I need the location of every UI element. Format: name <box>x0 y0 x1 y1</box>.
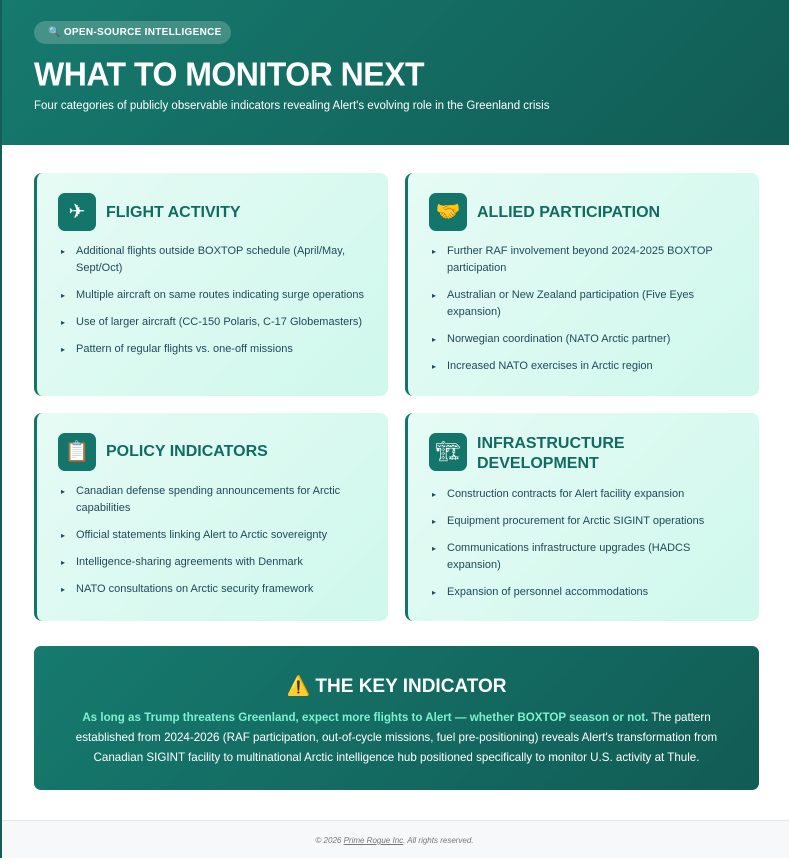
list: Further RAF involvement beyond 2024-2025 BOXTOP participation <box>447 245 713 274</box>
list <box>432 488 704 598</box>
heading: ALLIED PARTICIPATION <box>477 204 660 221</box>
heading: INFRASTRUCTURE <box>477 435 625 452</box>
text: As long as Trump threatens Greenland, expect more flights to Alert — whether BOXTOP season or not. The pattern established from 2024-2026 (RAF participation, out-of-cycle missions, fuel pre-positioning) reveals Alert's transformation from Canadian SIGINT facility to multinational Arctic intelligence hub positioned specifically to monitor U.S. activity at Thule. <box>76 711 717 764</box>
badge: 🔍 OPEN-SOURCE INTELLIGENCE <box>48 27 222 38</box>
heading <box>477 435 625 472</box>
list: Communications infrastructure upgrades (HADCS expansion) <box>447 542 690 571</box>
list <box>61 245 364 355</box>
list: Intelligence-sharing agreements with Denmark <box>76 556 303 568</box>
badge <box>34 21 231 44</box>
list: Canadian defense spending announcements for Arctic capabilities <box>76 485 340 514</box>
heading: FLIGHT ACTIVITY <box>106 204 241 221</box>
panel: infrastructure <box>405 413 759 621</box>
list: NATO consultations on Arctic security framework <box>76 583 313 595</box>
heading: DEVELOPMENT <box>477 455 599 472</box>
panel: allied participation <box>405 173 759 396</box>
icon: plane <box>58 193 96 231</box>
list: Australian or New Zealand participation (Five Eyes expansion) <box>447 289 694 318</box>
panel: policy indicators <box>34 413 388 621</box>
list: Increased NATO exercises in Arctic region <box>447 360 653 372</box>
list: Use of larger aircraft (CC-150 Polaris, C-17 Globemasters) <box>76 316 362 328</box>
list: Additional flights outside BOXTOP schedule (April/May, Sept/Oct) <box>76 245 345 274</box>
list <box>61 485 340 595</box>
list: Expansion of personnel accommodations <box>447 586 648 598</box>
list <box>432 245 713 372</box>
heading: ⚠️ THE KEY INDICATOR <box>286 676 506 697</box>
icon: clipboard <box>58 433 96 471</box>
list: Norwegian coordination (NATO Arctic partner) <box>447 333 670 345</box>
panel: flight activity <box>34 173 388 396</box>
icon: handshake: 🤝 <box>436 201 460 223</box>
subtitle: Four categories of publicly observable indicators revealing Alert's evolving role in the Greenland crisis <box>34 100 549 112</box>
footer <box>0 820 789 858</box>
icon: crane: 🏗 <box>435 441 461 463</box>
icon: clipboard: 📋 <box>65 441 89 463</box>
icon: plane: ✈ <box>69 201 85 223</box>
list: Equipment procurement for Arctic SIGINT operations <box>447 515 704 527</box>
icon: handshake <box>429 193 467 231</box>
list: Construction contracts for Alert facility expansion <box>447 488 684 500</box>
list: Multiple aircraft on same routes indicating surge operations <box>76 289 364 301</box>
callout: key indicator <box>34 646 759 790</box>
list: Official statements linking Alert to Arctic sovereignty <box>76 529 327 541</box>
header <box>0 0 789 145</box>
icon: crane <box>429 433 467 471</box>
footer: © 2026 Prime Rogue Inc. All rights reserved. <box>315 836 474 845</box>
title: WHAT TO MONITOR NEXT <box>34 55 424 93</box>
heading: POLICY INDICATORS <box>106 443 268 460</box>
list: Pattern of regular flights vs. one-off missions <box>76 343 293 355</box>
